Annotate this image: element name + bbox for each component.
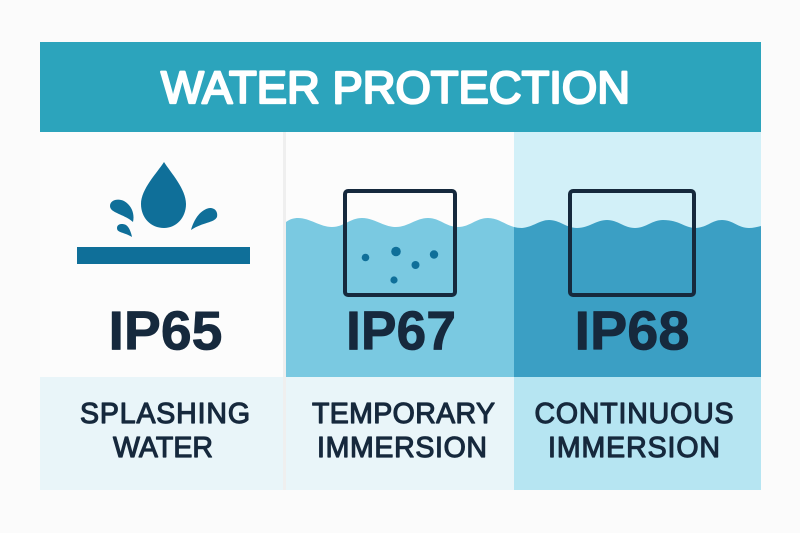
label: IP68: IP68: [574, 300, 690, 362]
panel: IP65 splashing water: [40, 132, 286, 490]
label: IP65: IP65: [108, 300, 222, 362]
panel: IP68 continuous immersion: [514, 132, 761, 377]
caption: temporary immersion: IMMERSION: [317, 432, 487, 464]
icon: water drop splash: [77, 162, 250, 264]
icon: box submerged: [570, 191, 694, 295]
title banner: [40, 42, 761, 132]
title banner: WATER PROTECTION: [161, 62, 630, 113]
water: IP68: [514, 220, 761, 377]
caption: splashing water: [40, 377, 283, 490]
panel: IP67 temporary immersion: [286, 132, 514, 377]
caption: temporary immersion: TEMPORARY: [312, 398, 495, 430]
caption: temporary immersion: [286, 377, 514, 490]
label: IP67: IP67: [346, 300, 456, 362]
caption: splashing water: SPLASHING: [80, 398, 250, 430]
caption: continuous immersion: CONTINUOUS: [534, 398, 734, 430]
caption: continuous immersion: [514, 377, 761, 490]
caption: splashing water: WATER: [113, 432, 213, 464]
water: IP67: [286, 218, 514, 377]
caption: continuous immersion: IMMERSION: [548, 432, 720, 464]
icon: box with particles: [345, 191, 455, 295]
